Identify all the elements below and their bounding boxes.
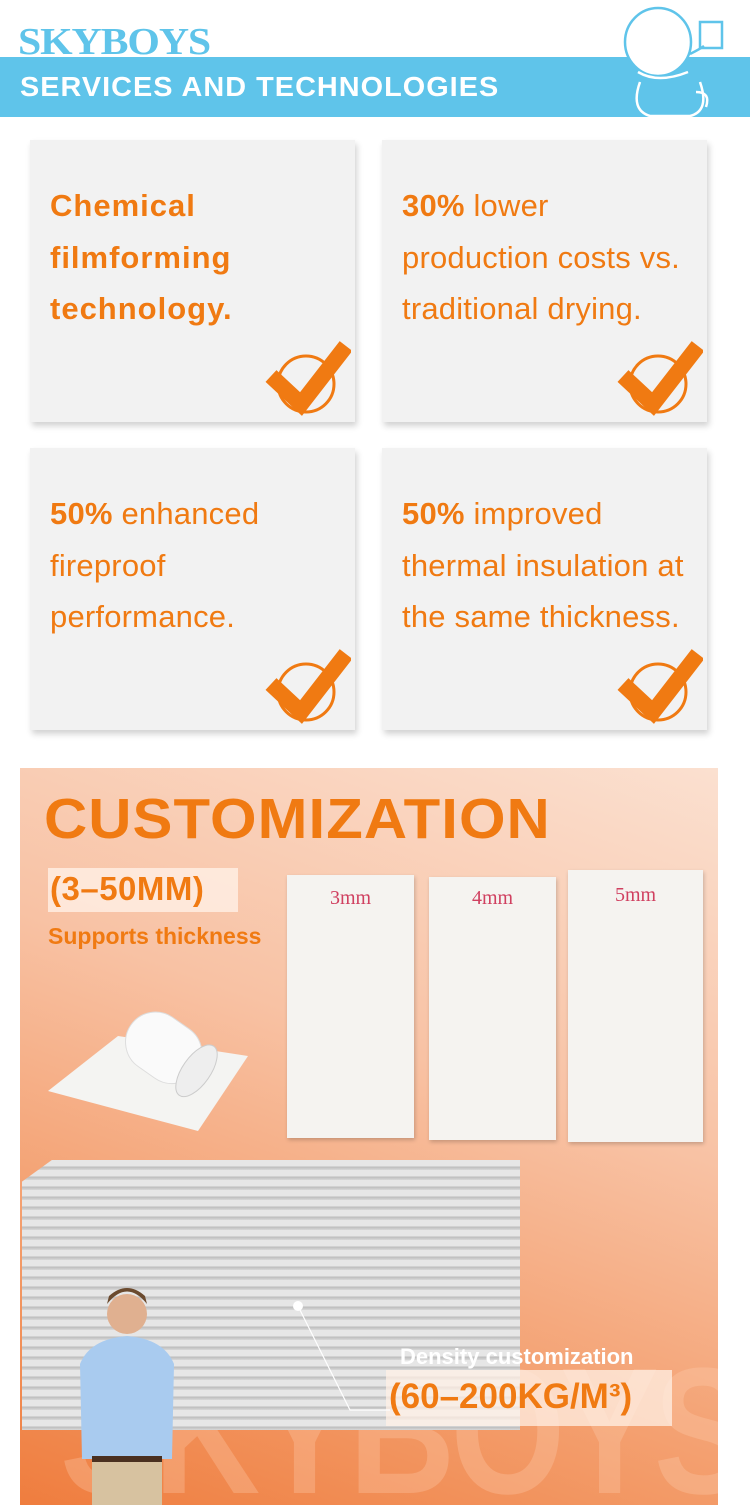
samples [287,875,414,1138]
text: supports thickness: Supports thickness [48,923,261,949]
icon: mascot [624,6,724,117]
card 2 [382,140,707,422]
panel: customization: 5mm [615,884,656,906]
card 3: 50% enhanced [50,496,259,531]
panel: customization [20,768,718,1505]
roll image [48,1012,248,1131]
density value box [386,1370,672,1426]
header band [0,57,750,117]
thickness label: (3–50MM) [50,870,204,907]
stack image [22,1160,520,1430]
heading: services: SERVICES AND TECHNOLOGIES [20,71,499,102]
thickness label [48,868,238,912]
card 4: thermal insulation at [402,548,684,582]
card 2: production costs vs. [402,240,680,274]
density value box: (60–200KG/M³) [389,1377,632,1416]
card 1: Chemical [50,188,196,223]
card 2: 30% lower [402,188,549,223]
card 2: traditional drying. [402,291,642,326]
card 1: filmforming [50,240,232,274]
icon: check [266,649,351,724]
logo: SKYBOYS [18,21,210,63]
card 4: the same thickness. [402,599,680,634]
heading: customization: CUSTOMIZATION [44,787,551,851]
connector [293,1301,390,1410]
icon: check [266,341,351,416]
panel: customization: 4mm [472,887,513,909]
card 4: 50% improved [402,496,603,531]
text: density customization: Density customization [400,1344,633,1369]
icon: check [618,649,703,724]
card 3 [30,448,355,730]
samples: 3mm [330,887,371,909]
person [80,1288,174,1505]
card 4 [382,448,707,730]
card 1: technology. [50,291,233,326]
icon: check [618,341,703,416]
card 3: fireproof [50,548,166,582]
card 3: performance. [50,599,235,634]
card 1 [30,140,355,422]
